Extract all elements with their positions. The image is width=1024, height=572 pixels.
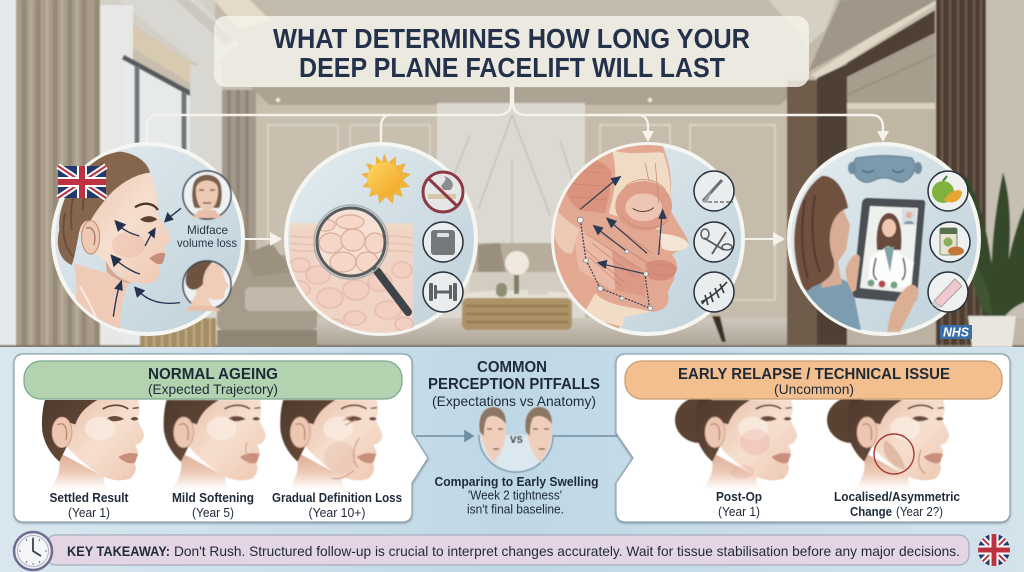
inset: frontal face xyxy=(183,171,231,219)
label: midface volume loss xyxy=(177,223,237,250)
icon: sleep mask xyxy=(848,156,922,182)
caption: localised asymmetric change: (Year 2?) xyxy=(896,504,943,519)
highlight ring on cheek xyxy=(874,434,914,474)
badge: NHS: NHS xyxy=(943,326,970,340)
key takeaway bar xyxy=(46,535,969,565)
text: comparing to early swelling xyxy=(434,474,599,516)
left wall xyxy=(256,105,440,320)
caption: mild softening xyxy=(172,490,254,520)
arrow: flow into comparison xyxy=(416,431,473,441)
caption: gradual definition loss xyxy=(272,490,402,520)
right ceiling beam and column xyxy=(811,0,1024,80)
face: settled result xyxy=(42,400,144,489)
title box xyxy=(214,16,809,87)
background: luxury clinic room xyxy=(0,0,1024,350)
caption: post-op: (Year 1) xyxy=(718,504,760,519)
icon: healthy fruit xyxy=(928,171,968,211)
sofa left xyxy=(217,255,317,330)
key takeaway bar: KEY TAKEAWAY: xyxy=(67,543,170,559)
face: gradual definition loss xyxy=(280,400,382,489)
main profile face xyxy=(58,152,181,343)
icon: dumbbell xyxy=(423,272,463,312)
panel: normal ageing xyxy=(14,354,428,522)
face: post-op xyxy=(675,397,797,489)
caption: gradual definition loss: Gradual Definition Loss xyxy=(272,490,402,505)
title box: DEEP PLANE FACELIFT WILL LAST xyxy=(299,52,725,83)
icon: magnifying glass xyxy=(314,205,408,312)
icon: weighing scale xyxy=(423,222,463,262)
icon: clock xyxy=(14,532,52,570)
face: mild softening xyxy=(164,400,266,489)
heading: common perception pitfalls: PERCEPTION PITFALLS xyxy=(428,376,600,393)
panel: telehealth follow-up and recovery xyxy=(789,144,979,335)
caption: gradual definition loss: (Year 10+) xyxy=(308,505,366,520)
coffee table xyxy=(462,290,572,302)
ceiling xyxy=(100,0,900,88)
label: midface volume loss: Midface xyxy=(187,223,228,237)
pill heading: early relapse xyxy=(625,361,1002,399)
icon: surgical scissors xyxy=(694,222,734,262)
label: midface volume loss: volume loss xyxy=(177,236,237,250)
heading: common perception pitfalls xyxy=(428,359,600,409)
icon: scalpel xyxy=(694,171,734,211)
patient viewed from behind xyxy=(790,176,862,335)
caption: localised asymmetric change xyxy=(834,489,960,519)
key takeaway bar: Don't Rush. Structured follow-up is crucial to interpret changes accurately. Wait for tissue stabilisation before any major decisions. xyxy=(174,543,960,559)
sofa right xyxy=(470,243,572,298)
floor xyxy=(256,318,787,350)
pill heading: normal ageing: NORMAL AGEING xyxy=(148,366,278,383)
comparison: early swelling vs baseline faces: vs xyxy=(510,431,523,446)
heading: common perception pitfalls: (Expectations vs Anatomy) xyxy=(432,393,596,409)
pill heading: early relapse: (Uncommon) xyxy=(774,381,854,397)
heading: common perception pitfalls: COMMON xyxy=(477,359,547,376)
pill heading: normal ageing xyxy=(24,361,402,399)
panel: early relapse / technical issue xyxy=(616,354,1010,522)
arrow: anatomy to recovery xyxy=(745,232,785,246)
caption: post-op: Post-Op xyxy=(716,489,762,504)
caption: settled result: Settled Result xyxy=(50,490,129,505)
icon: sutures xyxy=(694,272,734,312)
icon: UK flag xyxy=(58,166,106,198)
skin cross-section xyxy=(288,223,413,333)
caption: settled result xyxy=(50,490,129,520)
icon: supplements xyxy=(930,222,970,262)
plant xyxy=(965,172,1024,320)
arrow: anatomy to skin xyxy=(244,232,282,246)
icon: sun xyxy=(361,153,411,204)
right wall xyxy=(585,105,790,320)
caption: settled result: (Year 1) xyxy=(68,505,110,520)
panel: facial ageing anatomy xyxy=(53,144,243,343)
inset: side profile xyxy=(183,261,231,311)
caption: post-op xyxy=(716,489,762,519)
icon: no smoking xyxy=(423,172,463,212)
caption: mild softening: Mild Softening xyxy=(172,490,254,505)
icon: UK flag badge xyxy=(978,534,1010,566)
table leg xyxy=(712,316,726,342)
marble feature panel xyxy=(437,103,585,320)
window xyxy=(100,5,133,350)
caption: mild softening: (Year 5) xyxy=(192,505,234,520)
text: comparing to early swelling: isn't final baseline. xyxy=(467,502,564,516)
caption: localised asymmetric change: Localised/Asymmetric xyxy=(834,489,960,504)
muscle face illustration xyxy=(545,143,689,330)
comparison: early swelling vs baseline faces xyxy=(479,407,553,472)
pill heading: early relapse: EARLY RELAPSE / TECHNICAL ISSUE xyxy=(678,366,950,383)
title box: WHAT DETERMINES HOW LONG YOUR xyxy=(273,23,750,54)
pill heading: normal ageing: (Expected Trajectory) xyxy=(148,381,278,397)
gold radiator cover xyxy=(140,318,216,348)
icon: topical cream tube xyxy=(928,272,968,312)
caption: localised asymmetric change: Change xyxy=(850,504,892,519)
panel: deep plane muscle anatomy xyxy=(545,143,743,334)
tablet with video call doctor xyxy=(846,198,925,332)
connector arrows from title xyxy=(147,87,889,146)
panel: common perception pitfalls xyxy=(416,359,617,516)
panel: skin and lifestyle factors xyxy=(286,144,476,334)
far left sheer and curtains xyxy=(0,0,16,350)
bottom section background xyxy=(0,347,1024,572)
text: comparing to early swelling: Comparing to Early Swelling xyxy=(434,474,599,489)
text: comparing to early swelling: 'Week 2 tightness' xyxy=(468,488,562,502)
face: localised asymmetric change xyxy=(827,397,949,489)
